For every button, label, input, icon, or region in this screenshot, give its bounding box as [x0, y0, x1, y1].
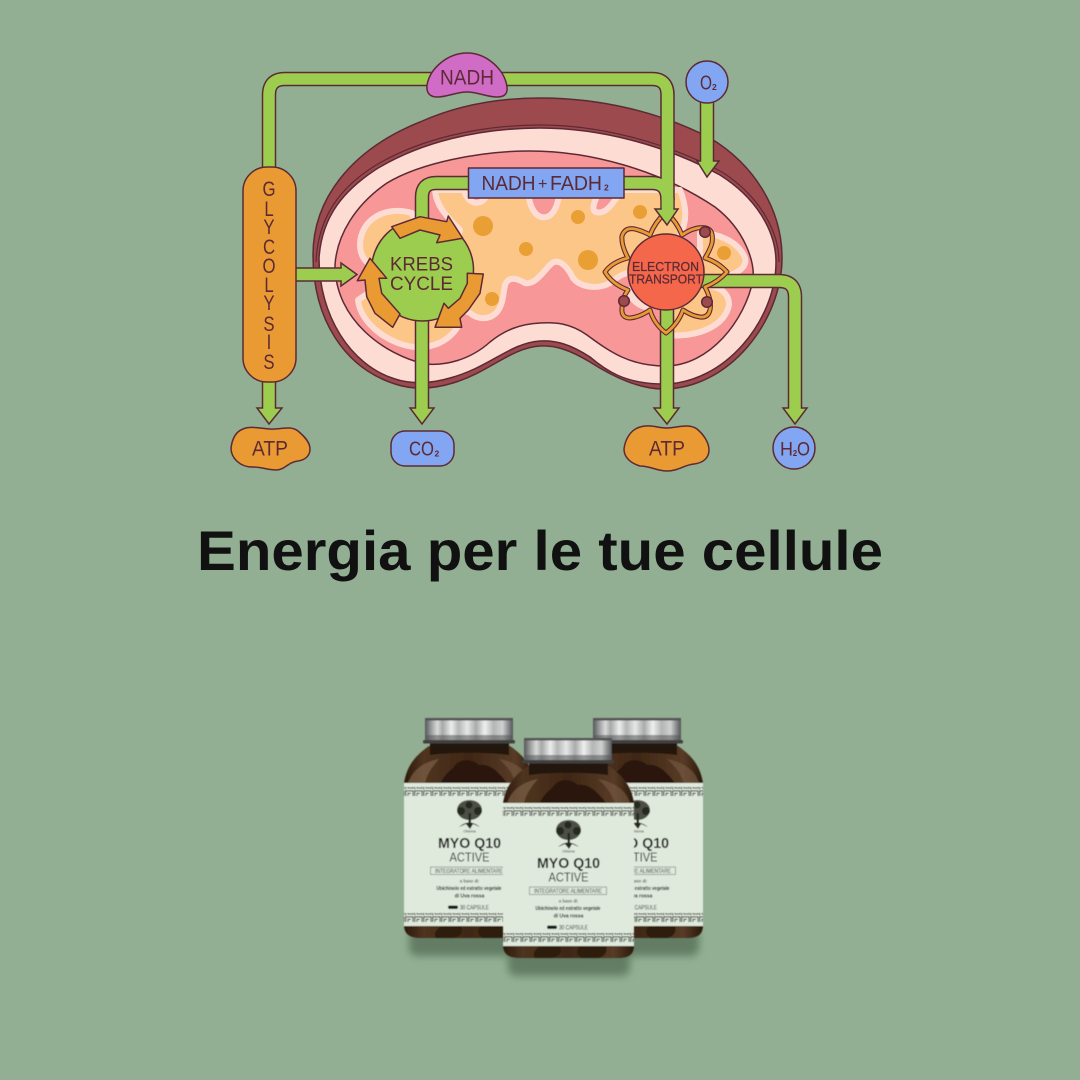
arrow: glycolysis to Krebs: [294, 263, 357, 286]
arrow: glycolysis to NADH: [269, 79, 432, 170]
orbits outline: [605, 212, 727, 333]
glycolysis letters: L: [264, 198, 274, 222]
glycolysis letters: C: [263, 236, 275, 260]
product name: MYO Q10: [537, 856, 600, 872]
H2O bubble: 2: [793, 449, 798, 458]
CO2 pill: [391, 431, 454, 466]
Krebs cycle: [357, 216, 483, 327]
jar: left: [404, 718, 535, 956]
tree icon: [457, 800, 482, 829]
orbits fill: [605, 212, 727, 333]
matrix lobe: lower right: [665, 285, 729, 335]
jar: right: di Uva rossa: [623, 894, 653, 900]
H2O bubble: H: [780, 440, 793, 460]
jar: right: ACTIVE: [618, 850, 658, 864]
NADH + FADH2 box: [468, 168, 624, 198]
glycolysis letters: Y: [263, 292, 275, 316]
brand: Olisma: [562, 848, 575, 854]
Krebs label: CYCLE: [390, 274, 453, 295]
Krebs arrow: left: [357, 258, 400, 327]
mitochondrion diagram: [313, 98, 782, 389]
O2 bubble: [686, 61, 728, 103]
jar: left: ACTIVE: [450, 850, 490, 864]
arrowhead into electron transport: [655, 198, 678, 225]
Krebs circle: [372, 219, 474, 321]
jar: left: INTEGRATORE ALIMENTARE: [435, 869, 503, 875]
shadow: [577, 928, 699, 956]
NADH bean: NADH: [440, 66, 494, 90]
glycolysis letters: S: [263, 351, 275, 375]
CO2 pill: CO: [409, 439, 434, 461]
brand: Olisma: [463, 828, 476, 834]
outer membrane: [313, 98, 782, 389]
O2 bubble: 2: [712, 82, 717, 92]
tree icon: [556, 820, 581, 849]
matrix with cristae: [435, 190, 685, 318]
jar: centre: [503, 738, 634, 976]
label: [404, 783, 535, 926]
NADH + FADH2 box: +: [538, 176, 547, 193]
electron transport: [605, 212, 727, 333]
H2O bubble: [773, 427, 815, 469]
CO2 pill: 2: [434, 448, 440, 458]
arrows: NADH and FADH to electron transport shafts: [500, 79, 668, 212]
jar: centre: a base di:: [559, 898, 578, 904]
glycolysis letters: L: [264, 274, 274, 298]
arrow: oxygen into membrane: [697, 100, 719, 177]
jar: centre: INTEGRATORE ALIMENTARE: [534, 889, 602, 895]
NADH + FADH2 box: NADH: [482, 173, 536, 195]
ATP blob right: [624, 426, 709, 471]
electrons: [619, 227, 712, 307]
glass: [503, 766, 634, 958]
jar: left: a base di:: [460, 878, 479, 884]
product name: MYO Q10: [438, 836, 501, 852]
ATP blob right: ATP: [649, 438, 685, 461]
jar: centre: 30 CAPSULE: [559, 926, 588, 932]
ATP blob left: [231, 427, 310, 470]
jar: right: 30 CAPSULE: [628, 906, 657, 912]
jar: right: INTEGRATORE ALIMENTARE: [603, 869, 671, 875]
label: [503, 803, 634, 946]
arrow: glycolysis to ATP: [257, 380, 282, 424]
H2O bubble: O: [797, 440, 810, 460]
inner membrane fold: [319, 128, 776, 384]
arrow: electron transport to ATP: [654, 305, 679, 424]
product name: MYO Q10: [606, 836, 669, 852]
glass: [572, 746, 703, 938]
Krebs arrow: right: [435, 273, 483, 327]
arrow: electron transport to water: [700, 281, 807, 424]
Krebs arrow: top: [392, 216, 463, 243]
intermembrane space: [335, 151, 753, 366]
title: Energia per le tue cellule: [197, 520, 883, 582]
cap: [524, 738, 612, 762]
jar: left: di Uva rossa: [455, 894, 485, 900]
Krebs label: KREBS: [390, 255, 453, 276]
glycolysis letters: G: [262, 178, 276, 202]
electron transport circle: [628, 234, 704, 310]
NADH + FADH2 box: 2: [604, 182, 609, 192]
glycolysis letters: Y: [263, 216, 275, 240]
product jars: [404, 718, 703, 976]
matrix lobe: upper left: [360, 211, 420, 270]
brand: Olisma: [631, 828, 644, 834]
matrix granules: [473, 205, 731, 306]
jar: right: a base di:: [628, 878, 647, 884]
shadow: [409, 928, 531, 956]
white crista blob under electron transport: [622, 285, 660, 310]
NADH + FADH2 box: FADH: [550, 173, 602, 195]
jar: centre: Ubichinolo ed estratto vegetale: [536, 906, 601, 912]
glycolysis letters: I: [267, 331, 271, 355]
glycolysis letters: S: [263, 313, 275, 337]
arrow: Krebs to CO2: [410, 320, 434, 424]
ATP blob left: ATP: [252, 438, 288, 461]
glass: [404, 746, 535, 938]
NADH bean: [427, 53, 507, 97]
jar: right: Ubichinolo ed estratto vegetale: [604, 886, 670, 892]
label: [572, 783, 703, 926]
cap: [425, 718, 513, 742]
shadow: [508, 948, 630, 976]
electron transport label: ELECTRON: [632, 260, 699, 274]
glycolysis letters: O: [262, 255, 276, 279]
tree icon: [625, 800, 650, 829]
O2 bubble: O: [700, 72, 712, 94]
matrix lobe: upper right: [700, 233, 745, 282]
glycolysis box: [243, 167, 296, 382]
matrix lobe: lower left: [358, 285, 457, 347]
jar: centre: di Uva rossa: [554, 914, 584, 920]
arrow: NADH + FADH2 to Krebs: [422, 183, 472, 222]
electron transport label: TRANSPORT: [629, 272, 703, 286]
cap: [593, 718, 681, 742]
jar: centre: ACTIVE: [548, 870, 589, 884]
jar: right: [572, 718, 703, 956]
membrane double line: [316, 125, 779, 262]
jar: left: 30 CAPSULE: [460, 906, 489, 912]
jar: left: Ubichinolo ed estratto vegetale: [436, 886, 502, 892]
